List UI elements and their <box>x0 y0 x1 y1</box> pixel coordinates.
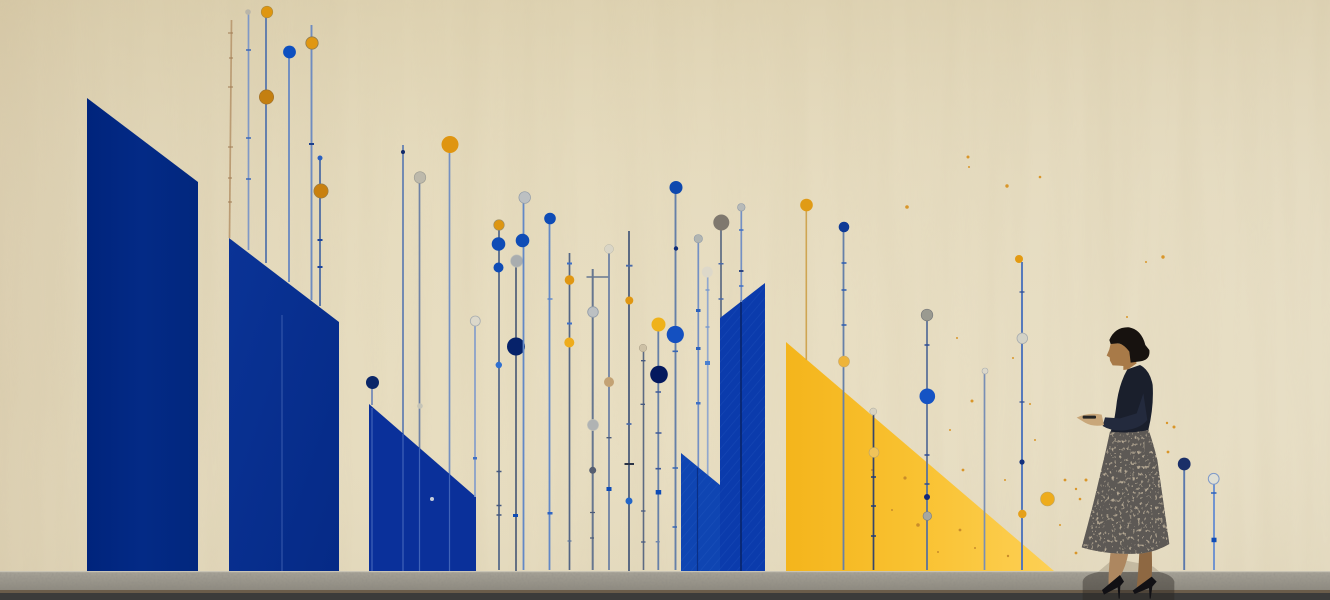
bar: yellow triangle <box>786 342 1054 571</box>
floor shadow <box>1083 572 1174 600</box>
bar: first blue column <box>87 98 198 571</box>
stem: navy and yellow dots x843 <box>838 222 850 570</box>
stem: orange dot x449 <box>442 136 458 571</box>
stem: two yellow dots x569 <box>564 253 574 570</box>
shoes <box>1102 575 1157 599</box>
stem: navy dot above third triangle <box>366 376 379 405</box>
cardigan <box>1103 365 1153 433</box>
woman figure <box>1077 327 1174 600</box>
stems: left cluster above second column <box>228 6 328 306</box>
stem: navy dot x1184 <box>1178 458 1191 570</box>
stem: grey dot x698 <box>694 234 702 570</box>
bar: second blue column <box>229 238 339 571</box>
hair <box>1109 327 1149 363</box>
stem: grey and navy dots x516 <box>507 255 525 571</box>
stem: grey dots and bracket x592 <box>586 269 609 570</box>
stem: yellow and navy dots x658 <box>650 318 668 570</box>
legs <box>1109 547 1152 587</box>
stem: grey dot x420 <box>414 172 426 571</box>
concrete ledge floor <box>0 571 1330 600</box>
stem: two blue dots x675 <box>667 181 684 570</box>
bar: short blue triangle <box>681 453 720 571</box>
stem: pale dot x475 <box>470 316 480 497</box>
stem: grey and blue dots x927 <box>920 309 935 570</box>
wall shadow <box>1098 558 1159 572</box>
stem: yellow dot x873 <box>869 408 879 570</box>
stem: pale and tan dots x609 <box>604 244 614 570</box>
stem: bars x629 <box>624 231 634 571</box>
hands and phone <box>1077 414 1104 426</box>
paint splatters <box>905 156 1176 554</box>
stem: pale dot x1214 <box>1208 473 1219 570</box>
stem: grey dot x741 <box>738 204 745 302</box>
stem: blue dot x549 <box>544 213 556 570</box>
stem: tan dot x643 <box>639 344 647 570</box>
stem: tall right x1022 <box>1015 255 1028 570</box>
stem: tall line x403 <box>401 145 405 571</box>
stem: triple dots x499 <box>492 220 505 570</box>
bar: tall blue column <box>720 283 765 571</box>
stem: two dots x523 <box>516 192 530 570</box>
stem: taupe dot x721 <box>713 214 729 320</box>
stem: pale dot x984 <box>982 368 988 570</box>
loose yellow dot <box>1040 492 1054 506</box>
stem: pale dot x707 <box>702 266 713 485</box>
stem: orange dot x806 <box>800 199 813 360</box>
skirt <box>1082 430 1170 554</box>
bar: third blue triangle <box>369 404 476 571</box>
neck and face <box>1107 342 1137 370</box>
